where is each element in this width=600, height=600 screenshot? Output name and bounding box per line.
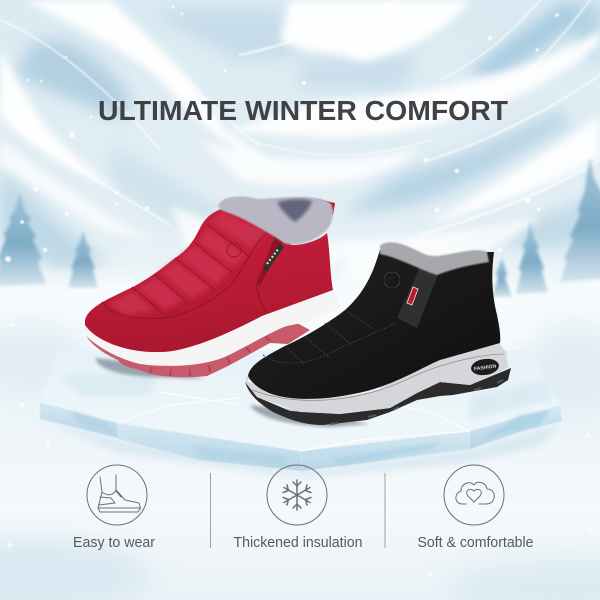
black boot fur collar xyxy=(380,242,489,275)
black boot midsole groove xyxy=(252,354,504,400)
label: thickened insulation: Thickened insulation xyxy=(234,535,362,551)
snow-covered trees left xyxy=(0,192,98,288)
label: easy to wear: Easy to wear xyxy=(73,535,155,551)
black boot fashion badge: FASHION xyxy=(474,363,497,373)
red boot upper xyxy=(85,209,333,352)
icon: snowflake in circle xyxy=(267,465,327,525)
title: ULTIMATE WINTER COMFORT xyxy=(98,95,508,126)
red boot logo emboss xyxy=(227,243,241,257)
ice soft ground shadow xyxy=(40,420,562,478)
divider left xyxy=(210,473,211,548)
red boot quilted panels xyxy=(108,212,268,315)
black boot midsole highlight xyxy=(248,380,380,396)
ice top surface xyxy=(40,350,560,451)
ice right front side face xyxy=(300,431,470,471)
ice platform xyxy=(40,350,562,478)
ice left side face xyxy=(40,402,118,438)
feature: thickened insulation xyxy=(234,465,362,551)
ice right side face xyxy=(470,405,562,449)
red boot outsole xyxy=(83,323,310,377)
red boot collar back tab xyxy=(318,199,335,215)
red boot outsole lug notches xyxy=(150,337,270,376)
black boot outsole xyxy=(245,368,511,425)
divider right xyxy=(384,473,386,548)
red boot stitching xyxy=(102,227,273,318)
red winter boot xyxy=(82,196,340,377)
black boot red zipper tag xyxy=(407,287,418,305)
black winter boot xyxy=(245,242,511,425)
black boot logo emboss xyxy=(384,272,400,288)
red boot midsole xyxy=(82,288,340,366)
red boot fur collar xyxy=(218,196,333,244)
black boot stitching xyxy=(263,310,397,365)
black boot upper xyxy=(248,250,500,399)
feature: easy to wear xyxy=(73,465,155,551)
feature: soft and comfortable xyxy=(418,465,534,551)
label: soft and comfortable: Soft & comfortable xyxy=(418,535,534,551)
background: winter sky with wind swept snow xyxy=(0,0,600,320)
black boot mesh panel xyxy=(397,267,438,328)
shoe shadows on ice xyxy=(95,358,370,427)
black boot midsole xyxy=(245,342,508,414)
background: snow ground xyxy=(0,265,600,600)
icon: shoe in circle xyxy=(87,465,147,525)
black boot fashion badge xyxy=(470,357,500,377)
ice front side face xyxy=(118,423,303,471)
snow-covered trees right xyxy=(492,158,600,297)
red boot zipper slit xyxy=(256,236,284,286)
icon: cloud with heart in circle xyxy=(444,465,504,525)
red boot zipper tag xyxy=(263,244,284,271)
red boot fur lining xyxy=(277,199,312,222)
